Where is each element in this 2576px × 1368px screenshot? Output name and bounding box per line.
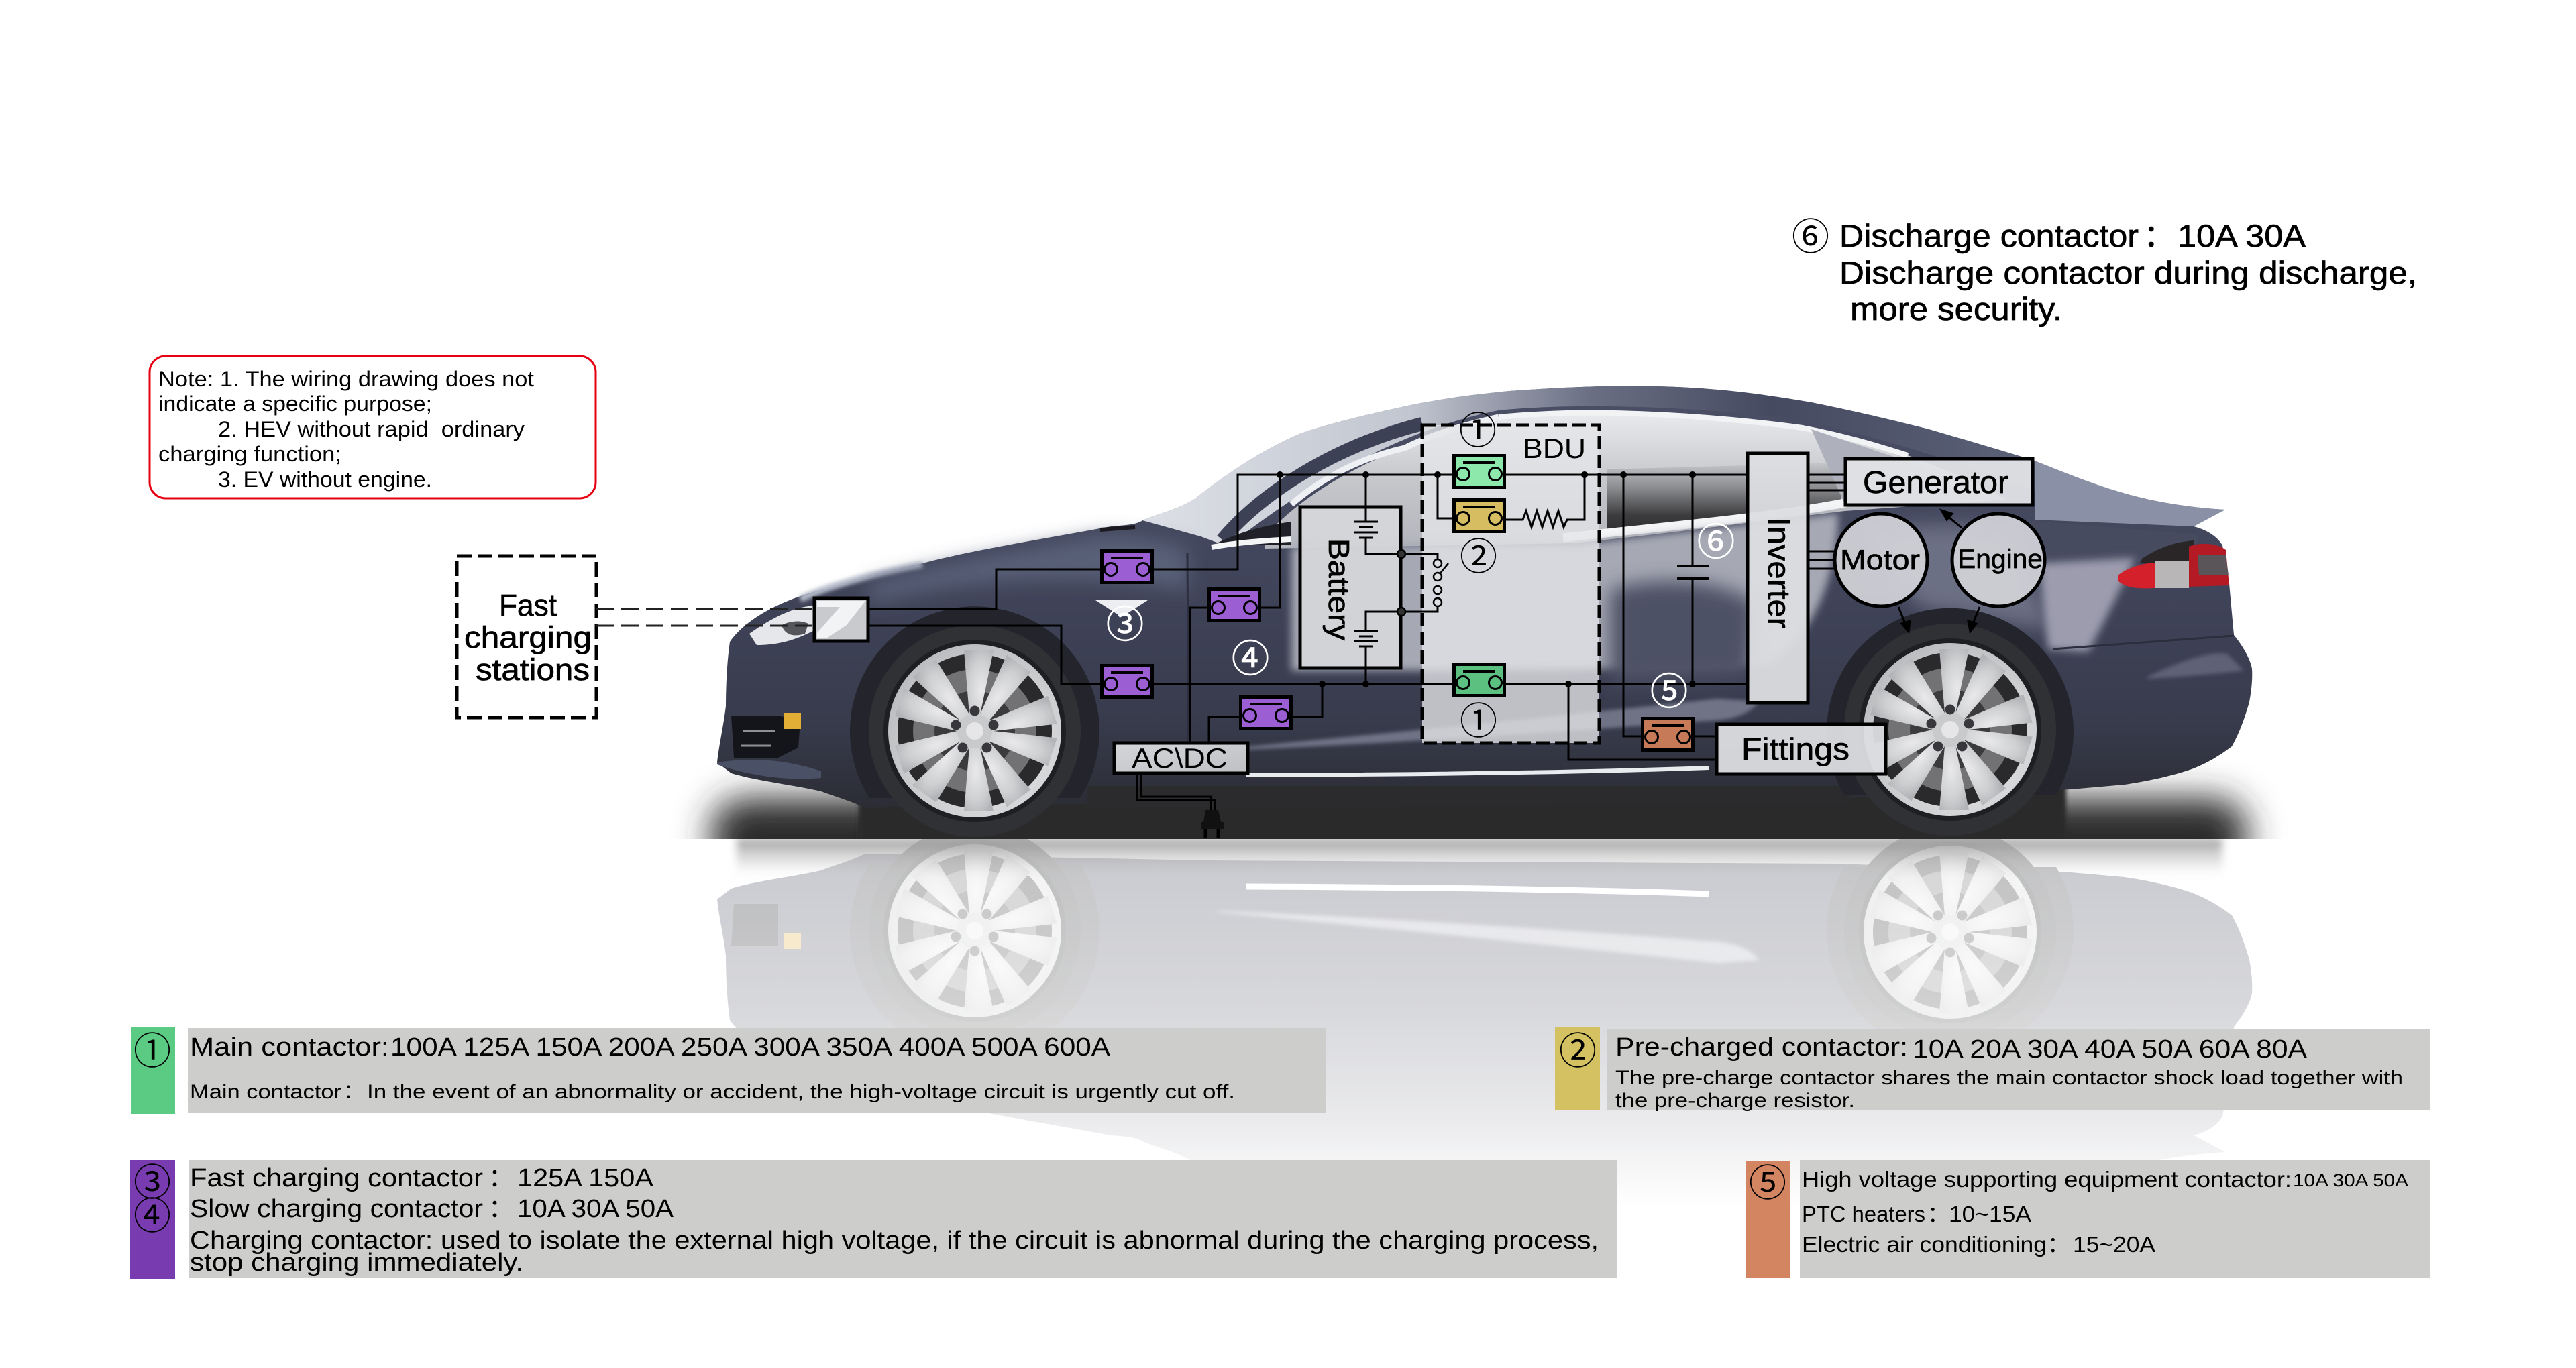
- panel: high voltage supporting equipment contactor: 10~15A: [1949, 1202, 2031, 1227]
- panel: high voltage supporting equipment contactor: ：: [2047, 1232, 2070, 1257]
- panel: fast and slow charging contactors: 125A 150A: [517, 1164, 654, 1192]
- inverter: [1748, 453, 1808, 703]
- panel: fast and slow charging contactors: Charging contactor: used to isolate the external high voltage, if the circuit is abnormal during the charging process,: [190, 1227, 1599, 1255]
- panel: main contactor: ①: [133, 1021, 171, 1076]
- battery: Battery: [1322, 538, 1355, 640]
- panel: high voltage supporting equipment contactor: ：: [1927, 1202, 1949, 1227]
- panel: pre-charged contactor: Pre-charged contactor:: [1615, 1033, 1908, 1062]
- panel: main contactor: [131, 1021, 1326, 1114]
- engine: Engine: [1957, 545, 2043, 574]
- panel: main contactor: In the event of an abnormality or accident, the high-voltage circuit is urgently cut off.: [367, 1081, 1235, 1103]
- panel: pre-charged contactor: 10A 20A 30A 40A 50A 60A 80A: [1913, 1035, 2308, 1064]
- panel: fast and slow charging contactors: [130, 1153, 1617, 1279]
- panel: high voltage supporting equipment contactor: ⑤: [1749, 1153, 1786, 1208]
- motor: [1835, 514, 1927, 606]
- number markers on the diagram: ②: [1460, 527, 1497, 581]
- note box: 3. EV without engine.: [218, 467, 432, 492]
- panel: fast and slow charging contactors: Fast charging contactor: [190, 1164, 483, 1192]
- panel: high voltage supporting equipment contactor: Electric air conditioning: [1802, 1232, 2047, 1257]
- number markers on the diagram: ⑤: [1650, 662, 1688, 716]
- battery: [1300, 504, 1401, 671]
- discharge contactor callout: [1792, 207, 2417, 327]
- note box: [150, 356, 596, 498]
- panel: main contactor: Main contactor:: [190, 1033, 389, 1062]
- panel: fast and slow charging contactors: ：: [488, 1195, 514, 1223]
- discharge contactor callout: more security.: [1850, 291, 2062, 327]
- fast charging stations box: [457, 556, 596, 718]
- motor: Motor: [1840, 544, 1920, 575]
- panel: high voltage supporting equipment contactor: PTC heaters: [1802, 1202, 1925, 1227]
- note box: charging function;: [158, 442, 341, 466]
- panel: high voltage supporting equipment contactor: 10A 30A 50A: [2293, 1170, 2408, 1190]
- number markers on the diagram: ①: [1460, 691, 1497, 746]
- arrows from motor and engine: [1898, 510, 1980, 632]
- panel: high voltage supporting equipment contactor: 15~20A: [2073, 1232, 2155, 1257]
- number markers on the diagram: ①: [1459, 401, 1497, 455]
- panel: fast and slow charging contactors: stop charging immediately.: [190, 1249, 523, 1277]
- generator: Generator: [1863, 465, 2008, 500]
- inverter: Inverter: [1762, 517, 1796, 628]
- panel: high voltage supporting equipment contactor: [1746, 1153, 2430, 1278]
- discharge contactor callout: 10A 30A: [2178, 218, 2306, 253]
- fast charging stations box: charging: [464, 620, 592, 654]
- slow charging contactor lower: [1241, 697, 1291, 728]
- fast charging contactor lower: [1102, 665, 1152, 697]
- panel: fast and slow charging contactors: 10A 30A 50A: [517, 1195, 674, 1223]
- panel: pre-charged contactor: ②: [1559, 1021, 1597, 1076]
- pre-charge contactor: [1454, 500, 1504, 531]
- ground shadow: [682, 768, 2276, 839]
- AC/DC converter: [1114, 742, 1248, 774]
- BDU dashed box: [1422, 425, 1599, 743]
- note box: indicate a specific purpose;: [158, 392, 432, 416]
- battery disconnect switch: [1397, 550, 1448, 616]
- panel: pre-charged contactor: [1555, 1021, 2430, 1112]
- number markers on the diagram: ④: [1232, 629, 1269, 683]
- slow charging contactor upper: [1209, 589, 1260, 621]
- number markers on the diagram: ⑥: [1697, 512, 1735, 567]
- fittings: Fittings: [1741, 732, 1849, 766]
- discharge contactor callout: Discharge contactor: [1839, 218, 2139, 253]
- discharge contactor callout: Discharge contactor during discharge,: [1839, 255, 2417, 290]
- fast charging stations box: stations: [476, 652, 590, 687]
- dashed charging leads: [596, 609, 813, 626]
- reflected shadow band: [737, 838, 2222, 875]
- panel: fast and slow charging contactors: ④: [133, 1186, 171, 1241]
- BDU dashed box: BDU: [1523, 433, 1586, 464]
- car illustration: [717, 386, 2252, 837]
- panel: main contactor: ：: [343, 1081, 364, 1103]
- high-voltage wiring: [869, 475, 1845, 760]
- note box: 2. HEV without rapid ordinary: [218, 417, 525, 441]
- panel: pre-charged contactor: the pre-charge resistor.: [1615, 1090, 1855, 1112]
- discharge contactor callout: ：: [2143, 218, 2175, 253]
- supporting equipment contactor: [1642, 719, 1693, 750]
- main contactor bottom: [1454, 664, 1504, 696]
- AC/DC converter: AC\DC: [1132, 742, 1228, 774]
- panel: main contactor: 100A 125A 150A 200A 250A 300A 350A 400A 500A 600A: [390, 1033, 1111, 1062]
- discharge contactor callout: ⑥: [1792, 207, 1829, 262]
- icon: mains plug: [1137, 774, 1224, 838]
- note box: Note: 1. The wiring drawing does not: [158, 367, 534, 391]
- panel: fast and slow charging contactors: Slow charging contactor: [190, 1195, 483, 1223]
- panel: high voltage supporting equipment contactor: High voltage supporting equipment contactor:: [1802, 1167, 2292, 1192]
- car reflection: [717, 839, 2253, 1172]
- number markers on the diagram: [1106, 401, 1735, 746]
- panel: pre-charged contactor: The pre-charge contactor shares the main contactor shock load together with: [1615, 1067, 2403, 1089]
- number markers on the diagram: ③: [1106, 595, 1144, 649]
- generator: [1845, 459, 2033, 505]
- panel: fast and slow charging contactors: ③: [133, 1153, 171, 1207]
- BDU inner wiring: [1422, 475, 1599, 743]
- wire junction dots: [1277, 471, 1696, 687]
- panel: main contactor: Main contactor: [190, 1081, 341, 1103]
- engine: [1952, 514, 2045, 606]
- fast charging stations box: Fast: [499, 588, 557, 622]
- fittings: [1717, 724, 1886, 774]
- panel: fast and slow charging contactors: ：: [488, 1164, 514, 1192]
- capacitor: [1677, 566, 1709, 579]
- charging port: [814, 598, 868, 641]
- main contactor top: [1454, 456, 1504, 487]
- fast charging contactor upper: [1102, 551, 1152, 582]
